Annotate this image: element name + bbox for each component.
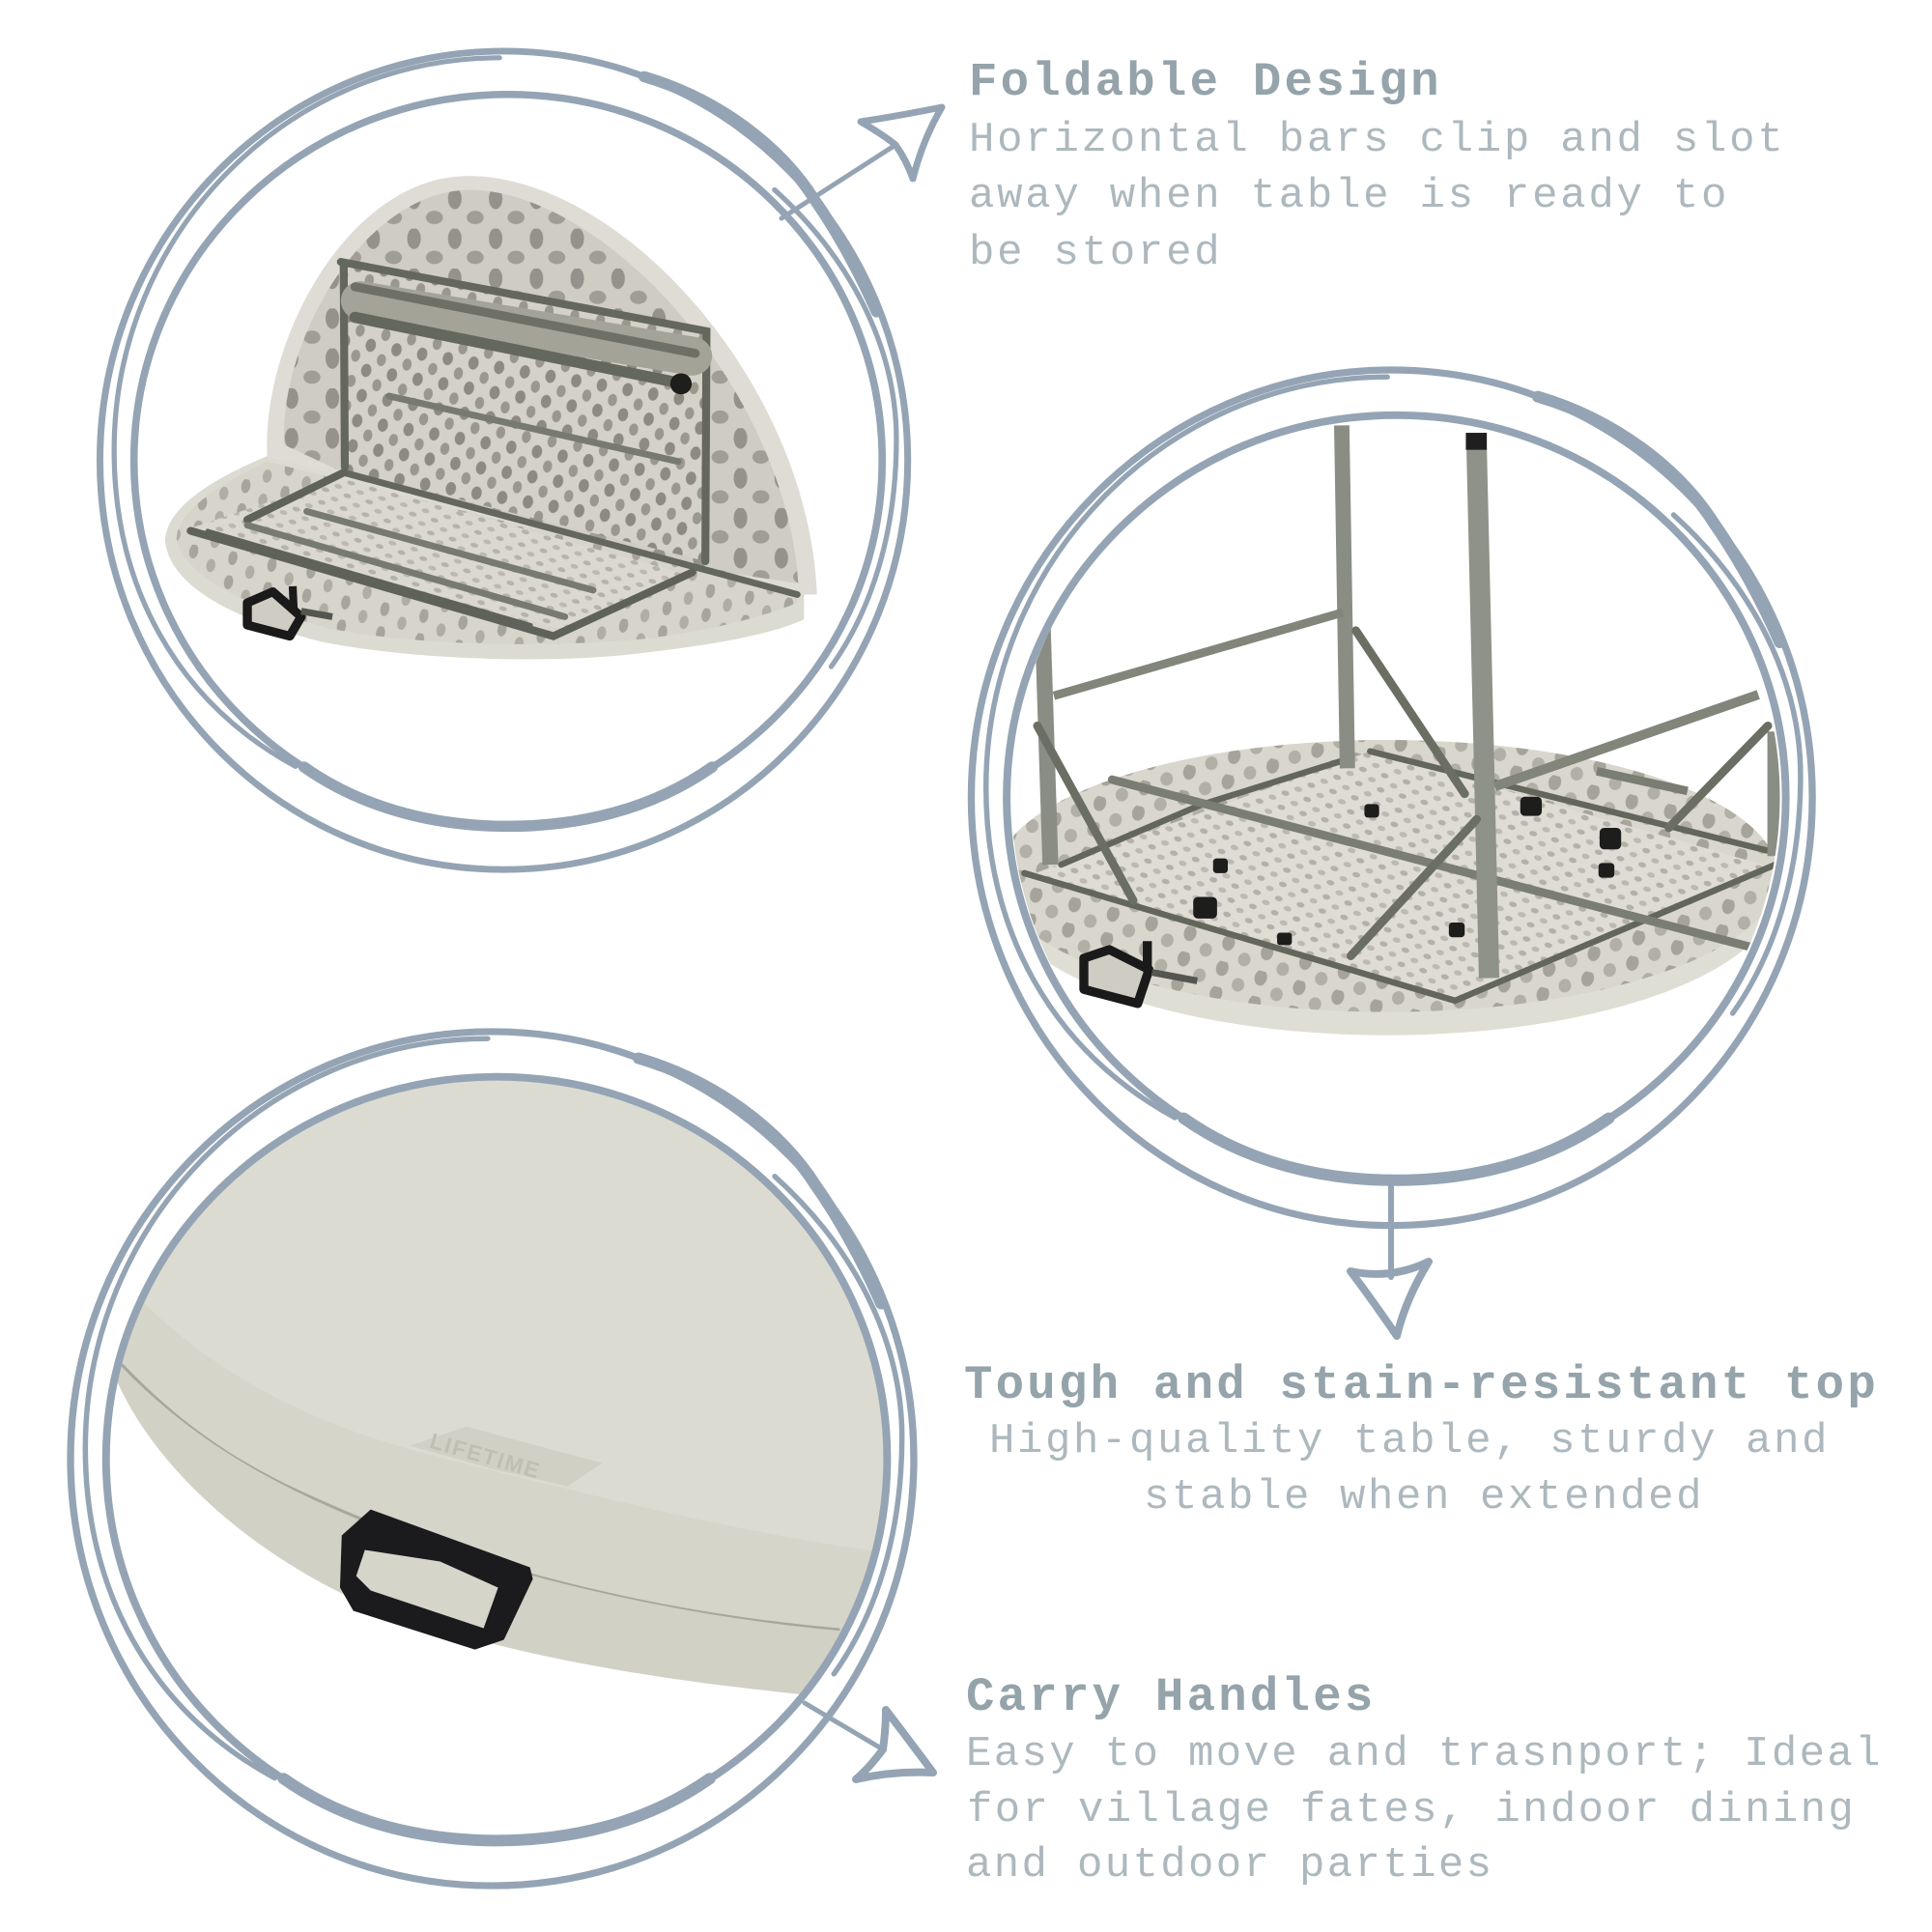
text block: carry handles bbox=[966, 1670, 1883, 1889]
carry handle bbox=[1084, 941, 1197, 1004]
folded table illustration bbox=[165, 176, 817, 659]
arrow: foldable to text bbox=[781, 107, 942, 218]
scribble circle: foldable bbox=[99, 51, 908, 869]
top face bbox=[162, 1080, 883, 1509]
body: away when table is ready to bbox=[969, 172, 1729, 220]
closed table close-up bbox=[118, 1080, 883, 1694]
scribble circle: handle bbox=[71, 1032, 914, 1886]
arrow: handle to text bbox=[805, 1703, 933, 1779]
frame bbox=[1024, 752, 1776, 1001]
body: for village fates, indoor dining bbox=[967, 1786, 1856, 1834]
lower inner deck bbox=[190, 478, 690, 631]
scribble circle: legs bbox=[971, 370, 1812, 1226]
panel: carry handle photo bbox=[71, 1032, 926, 1886]
embossed logo area bbox=[410, 1427, 603, 1487]
black clips bbox=[1193, 797, 1621, 945]
braces bbox=[1037, 631, 1768, 956]
carry handle bbox=[247, 586, 332, 637]
raised half of table bbox=[267, 176, 817, 594]
body bbox=[969, 116, 1785, 277]
upper rim bbox=[128, 1303, 840, 1629]
carry handle bbox=[340, 1510, 533, 1650]
body: be stored bbox=[969, 229, 1222, 277]
table underside bbox=[996, 425, 1778, 1036]
lower frame and bars bbox=[190, 472, 693, 637]
spare bar bbox=[1597, 771, 1688, 791]
bar end cap bbox=[670, 373, 692, 394]
text block: tough top bbox=[964, 1358, 1879, 1521]
panel: foldable table photo bbox=[99, 51, 908, 869]
logo letters: LIFETIME bbox=[427, 1428, 544, 1484]
leg top cap bbox=[1465, 433, 1487, 450]
cross bars bbox=[1054, 612, 1758, 786]
text block: foldable design bbox=[969, 55, 1785, 277]
lower half of table bbox=[165, 456, 804, 659]
upper frame and stowed bars bbox=[341, 262, 797, 594]
arrow: legs to text bbox=[1350, 1183, 1429, 1336]
body: stable when extended bbox=[1144, 1473, 1704, 1521]
table rim bbox=[1014, 846, 1773, 1036]
upper inner deck bbox=[341, 262, 706, 561]
legs bbox=[1042, 425, 1775, 978]
table underside surface bbox=[996, 740, 1778, 1012]
body bbox=[989, 1417, 1830, 1521]
panel: legs and frame photo bbox=[971, 370, 1812, 1226]
body bbox=[966, 1730, 1883, 1889]
deck panels bbox=[1027, 752, 1773, 1001]
seam bbox=[122, 1365, 839, 1630]
heading: Tough and stain-resistant top bbox=[964, 1358, 1879, 1412]
body: Horizontal bars clip and slot bbox=[969, 116, 1785, 164]
lower half edge bbox=[118, 1362, 842, 1694]
heading: Carry Handles bbox=[966, 1670, 1377, 1724]
body: and outdoor parties bbox=[966, 1841, 1493, 1889]
body: High-quality table, sturdy and bbox=[989, 1417, 1830, 1465]
body: Easy to move and trasnport; Ideal bbox=[966, 1730, 1883, 1778]
heading: Foldable Design bbox=[969, 55, 1442, 109]
